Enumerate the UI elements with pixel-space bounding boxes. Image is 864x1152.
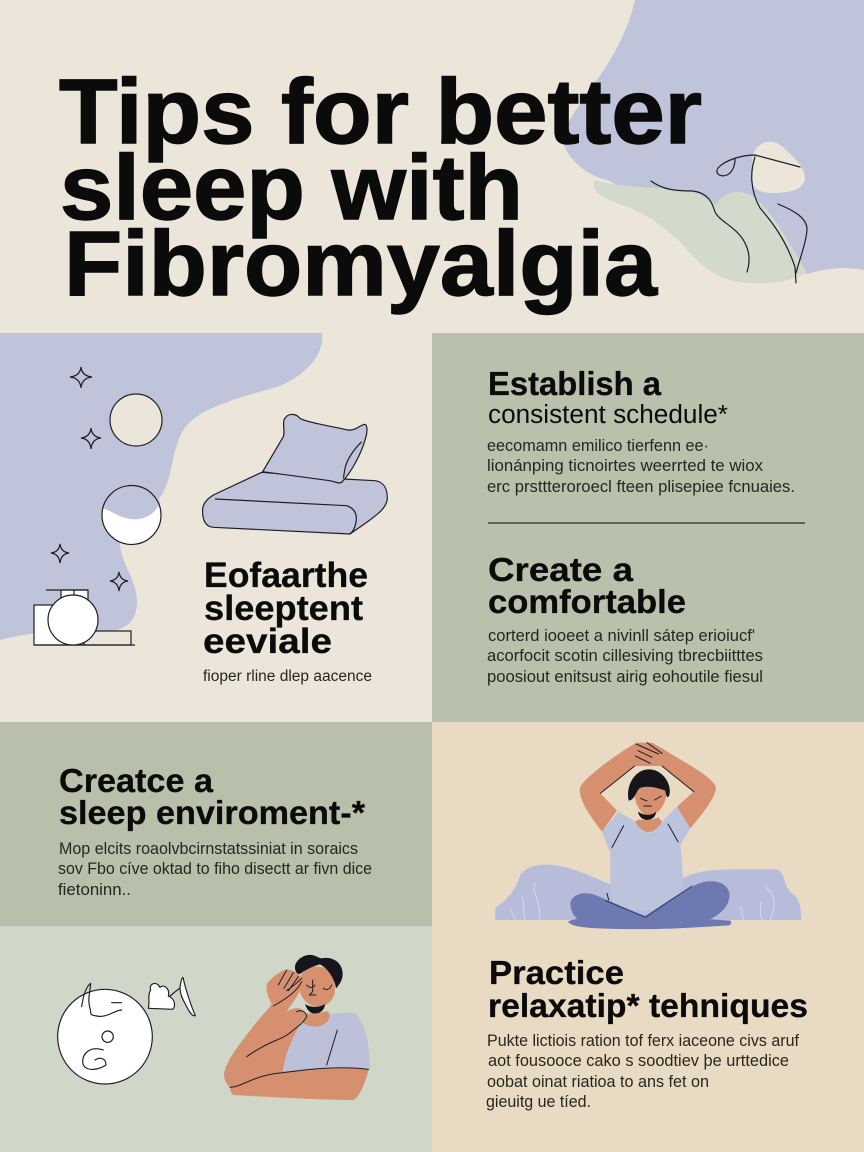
heading: eeviale [203, 622, 332, 661]
panel: sleep essentials illustration and text [0, 333, 387, 685]
icon: pillow on mattress [203, 414, 387, 534]
illustration: person holding head [224, 955, 370, 1100]
body text: relaxation [486, 1032, 799, 1111]
heading: create a sleep environment [59, 763, 365, 832]
heading: establish a consistent schedule: consistent schedule* [488, 401, 728, 429]
heading: create a sleep environment: sleep enviroment-* [59, 795, 365, 832]
heading: create a comfortable: comfortable [488, 584, 686, 621]
body text: relaxation: Pukte lictiois ration tof ferx iaceone civs aruf [487, 1032, 799, 1050]
body text: schedule: eecomamn emilico tierfenn ee· [487, 437, 709, 455]
body text: relaxation: gieuitg ue tíed. [486, 1093, 591, 1111]
title: Fibromyalgia [64, 213, 658, 315]
header decoration: abstract blobs and lines [561, 0, 864, 283]
heading [203, 556, 368, 661]
heading: practice relaxation techniques: relaxatip* tehniques [488, 988, 808, 1025]
body text: comfortable [487, 627, 763, 686]
heading: create a comfortable [488, 552, 686, 621]
body text: relaxation: aot fousooce cako s soodtiev þe urttedice [488, 1052, 789, 1070]
body text: comfortable: acorfocit scotin cillesiving tbrecbiitttes [487, 647, 763, 665]
panel: resting person illustration [0, 926, 432, 1152]
title: Tips for better [59, 61, 702, 163]
icon: crescent moon [102, 486, 161, 544]
body text: relaxation: oobat oinat riatioa to ans fet on [487, 1073, 709, 1091]
illustration: meditating person [495, 743, 801, 929]
heading: create a sleep environment: Creatce a [59, 763, 213, 800]
icon: sparkles [51, 367, 128, 591]
body text: environment: Mop elcits roaolvbcirnstatssiniat in soraics [59, 840, 358, 858]
heading: practice relaxation techniques: Practice [489, 955, 624, 992]
body text: environment: fietoninn.. [58, 881, 131, 899]
body text: environment [58, 840, 372, 899]
panel: relaxation techniques [432, 722, 864, 1152]
body text: comfortable: poosiout enitsust airig eohoutile fiesul [487, 668, 763, 686]
heading: establish a consistent schedule [488, 366, 728, 429]
body text: comfortable: corterd iooeet a nivinll sátep erioiucf' [488, 627, 755, 645]
heading: establish a consistent schedule: Establish a [488, 366, 661, 403]
panel: sleep environment text [0, 722, 432, 926]
caption: fioper rline dlep aacence [203, 668, 372, 685]
body text: schedule: erc prsttteroroecl fteen plisepiee fcnuaies. [487, 478, 795, 496]
body text: schedule: lionánping ticnoirtes weerrted te wiox [487, 457, 764, 475]
title: sleep with [60, 137, 523, 239]
heading: create a comfortable: Create a [488, 552, 633, 589]
panel: schedule and comfort tips [432, 333, 864, 722]
heading: Eofaarthe [204, 556, 368, 595]
body text: schedule [487, 437, 795, 496]
heading: practice relaxation techniques [488, 955, 808, 1025]
body text: environment: sov Fbo cíve oktad to fiho disectt ar fivn dice [58, 860, 372, 878]
title [59, 61, 702, 315]
heading: sleeptent [204, 589, 363, 628]
icon: white moon circle with doodles [58, 977, 195, 1084]
icon: bottle on shelf [34, 590, 135, 645]
icon: full moon [110, 394, 162, 446]
